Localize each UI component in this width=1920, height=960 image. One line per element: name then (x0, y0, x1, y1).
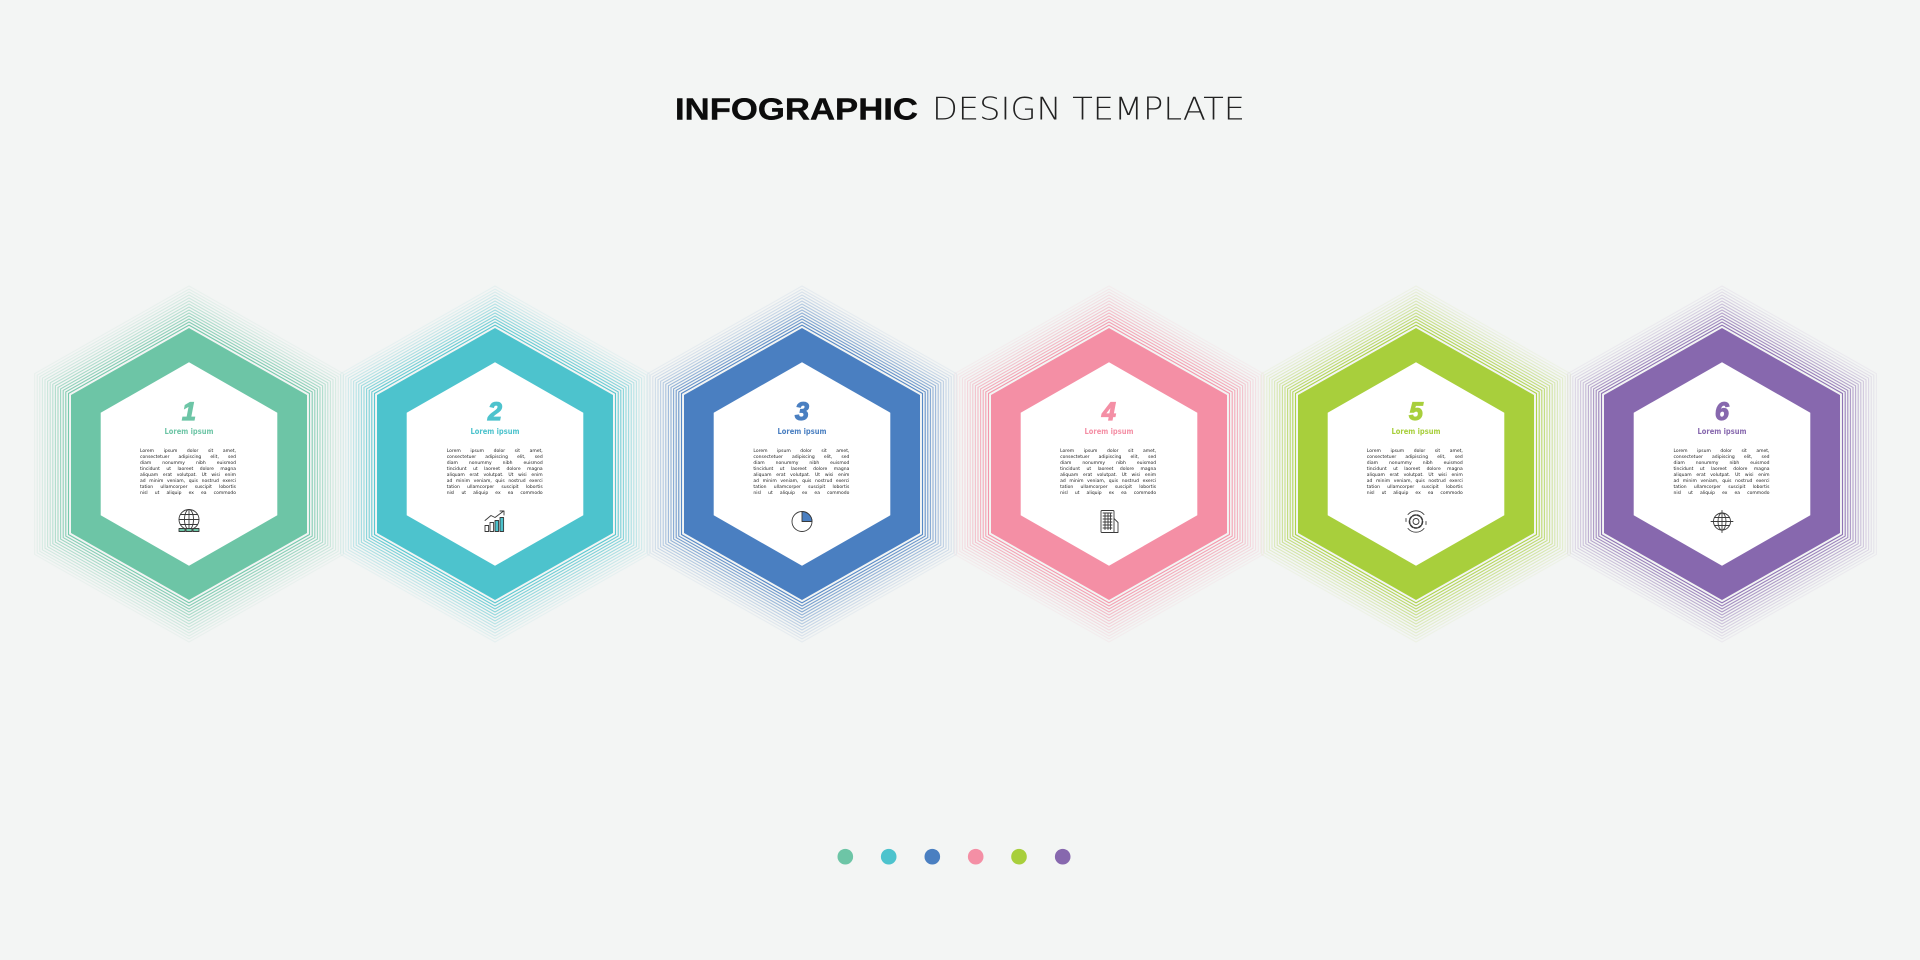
body text: tation ullamcorper suscipit lobortis (1673, 485, 1769, 490)
body text (753, 448, 850, 496)
body text: consectetuer adipiscing elit, sed (140, 455, 236, 460)
step number: 5 (1409, 398, 1424, 426)
hexagon frame (71, 328, 307, 600)
body text: consectetuer adipiscing elit, sed (447, 455, 543, 460)
hexagon frame (684, 328, 920, 600)
step heading: Lorem ipsum (1084, 427, 1133, 436)
step heading: Lorem ipsum (164, 427, 213, 436)
step number: 2 (487, 398, 502, 426)
body text: tation ullamcorper suscipit lobortis (1060, 485, 1156, 490)
body text: tincidunt ut laoreet dolore magna (447, 467, 543, 472)
icon: hand holding calculator (1101, 510, 1118, 532)
body text: ad minim veniam, quis nostrud exerci (140, 479, 236, 484)
panel: step 2 (340, 286, 650, 642)
step heading: Lorem ipsum (471, 427, 520, 436)
body text: nisl ut aliquip ex ea commodo (1060, 491, 1156, 496)
panel: step 1 (34, 286, 344, 642)
body text: tincidunt ut laoreet dolore magna (140, 467, 236, 472)
panel: step 3 (647, 286, 957, 642)
hexagon frame (1298, 328, 1534, 600)
hexagon rings (648, 286, 956, 642)
body text: nisl ut aliquip ex ea commodo (753, 491, 849, 496)
body text: Lorem ipsum dolor sit amet, (1367, 449, 1463, 454)
body text: tation ullamcorper suscipit lobortis (1367, 485, 1463, 490)
body text: tincidunt ut laoreet dolore magna (1060, 467, 1156, 472)
body text: consectetuer adipiscing elit, sed (753, 455, 849, 460)
body text: tincidunt ut laoreet dolore magna (1367, 467, 1463, 472)
body text: ad minim veniam, quis nostrud exerci (1673, 479, 1769, 484)
hexagon rings (34, 286, 343, 642)
hexagon frame (991, 328, 1227, 600)
panel: step 5 (1261, 286, 1571, 642)
hexagon white centre (407, 362, 584, 566)
hexagon rings (341, 286, 650, 642)
body text: nisl ut aliquip ex ea commodo (447, 491, 543, 496)
step number: 4 (1101, 398, 1116, 426)
icon: pie chart (792, 512, 812, 532)
pagination dots (838, 848, 1070, 864)
body text: ad minim veniam, quis nostrud exerci (753, 479, 849, 484)
icon: globe with people (179, 510, 199, 532)
hexagon rings (954, 286, 1263, 642)
body text (140, 448, 236, 496)
body text: consectetuer adipiscing elit, sed (1060, 455, 1156, 460)
body text: nisl ut aliquip ex ea commodo (1367, 491, 1463, 496)
body text: consectetuer adipiscing elit, sed (1367, 455, 1463, 460)
body text: nisl ut aliquip ex ea commodo (140, 491, 236, 496)
body text: diam nonummy nibh euismod (140, 461, 236, 466)
hexagon rings (1568, 286, 1877, 642)
body text: tation ullamcorper suscipit lobortis (753, 485, 849, 490)
panel: step 6 (1567, 286, 1877, 642)
body text: ad minim veniam, quis nostrud exerci (447, 479, 543, 484)
body text: Lorem ipsum dolor sit amet, (140, 449, 236, 454)
hexagon white centre (1634, 362, 1810, 566)
hexagon rings (1261, 286, 1570, 642)
icon: gear with circular arrows (1406, 511, 1426, 532)
hexagon frame (377, 328, 613, 600)
title: INFOGRAPHIC (675, 92, 918, 126)
body text: Lorem ipsum dolor sit amet, (753, 449, 849, 454)
step number: 3 (795, 398, 809, 426)
body text: tation ullamcorper suscipit lobortis (447, 485, 543, 490)
body text: diam nonummy nibh euismod (1367, 461, 1463, 466)
body text: aliquam erat volutpat. Ut wisi enim (140, 473, 236, 478)
body text (1673, 448, 1770, 496)
panel: step 4 (954, 286, 1264, 642)
body text: aliquam erat volutpat. Ut wisi enim (447, 473, 543, 478)
body text: ad minim veniam, quis nostrud exerci (1060, 479, 1156, 484)
body text: nisl ut aliquip ex ea commodo (1673, 491, 1769, 496)
body text: aliquam erat volutpat. Ut wisi enim (1367, 473, 1463, 478)
body text (446, 448, 543, 496)
body text (1366, 448, 1463, 496)
step heading: Lorem ipsum (1698, 427, 1747, 436)
body text: diam nonummy nibh euismod (753, 461, 849, 466)
hexagon white centre (1327, 362, 1504, 566)
body text: diam nonummy nibh euismod (1673, 461, 1769, 466)
step number: 1 (182, 398, 196, 426)
body text: diam nonummy nibh euismod (447, 461, 543, 466)
hexagon white centre (1020, 362, 1197, 566)
body text: Lorem ipsum dolor sit amet, (447, 449, 543, 454)
step heading: Lorem ipsum (778, 427, 827, 436)
body text: aliquam erat volutpat. Ut wisi enim (1673, 473, 1769, 478)
step heading: Lorem ipsum (1391, 427, 1440, 436)
body text: Lorem ipsum dolor sit amet, (1673, 449, 1769, 454)
body text: aliquam erat volutpat. Ut wisi enim (753, 473, 849, 478)
body text: tation ullamcorper suscipit lobortis (140, 485, 236, 490)
step number: 6 (1715, 398, 1730, 426)
hexagon white centre (100, 362, 277, 566)
body text (1060, 448, 1156, 496)
body text: ad minim veniam, quis nostrud exerci (1367, 479, 1463, 484)
body text: tincidunt ut laoreet dolore magna (1673, 467, 1769, 472)
hexagon white centre (714, 362, 890, 566)
icon: bar chart with rising arrow (485, 511, 504, 532)
body text: diam nonummy nibh euismod (1060, 461, 1156, 466)
icon: web globe (1711, 510, 1733, 532)
body text: consectetuer adipiscing elit, sed (1673, 455, 1769, 460)
title (675, 92, 1245, 128)
title: DESIGN TEMPLATE (932, 92, 1245, 128)
body text: tincidunt ut laoreet dolore magna (753, 467, 849, 472)
body text: Lorem ipsum dolor sit amet, (1060, 449, 1156, 454)
hexagon frame (1604, 328, 1840, 600)
body text: aliquam erat volutpat. Ut wisi enim (1060, 473, 1156, 478)
